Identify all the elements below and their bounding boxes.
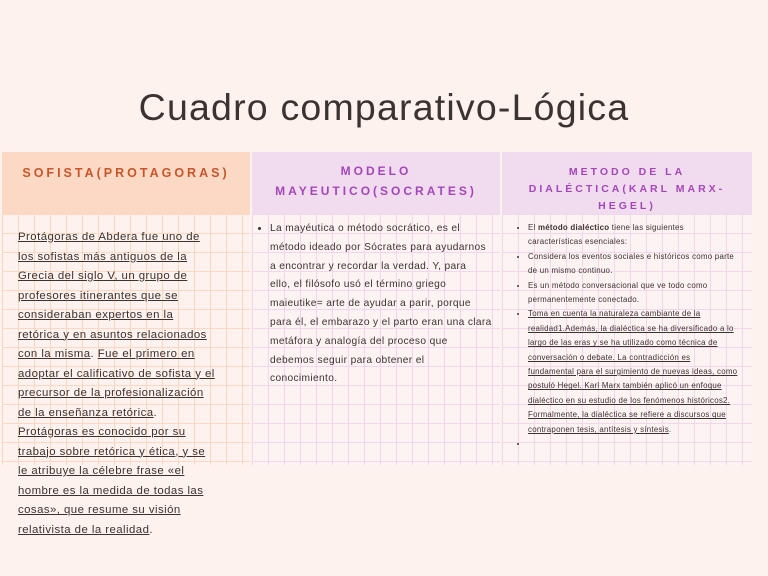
text: mayeutico [258, 223, 492, 384]
panel: dialectica body [502, 214, 752, 465]
panel: mayeutico body [252, 214, 500, 465]
text: sofista: profesores itinerantes que se [18, 290, 178, 302]
panel: mayeutico header: MAYEUTICO(SOCRATES) [275, 184, 477, 198]
text: dialectica: Toma en cuenta la naturaleza cambiante de la [528, 309, 700, 318]
text: mayeutico: para él, el embarazo y el parto eran una clara [270, 317, 492, 328]
text: dialectica: Considera los eventos sociales e históricos como parte [528, 252, 734, 261]
text: dialectica [517, 223, 738, 445]
text: dialectica: permanentemente conectado. [528, 295, 639, 304]
text: dialectica: de un mismo continuo. [528, 266, 613, 275]
panel: mayeutico header [252, 152, 500, 214]
title: Cuadro comparativo-Lógica [139, 86, 629, 128]
panel: sofista header: SOFISTA(PROTAGORAS) [22, 166, 230, 180]
text: dialectica: características esenciales: [528, 237, 627, 246]
panel: sofista header [2, 152, 250, 214]
panel: dialectica header: METODO DE LA [569, 166, 685, 178]
panel: dialectica header: DIALÉCTICA(KARL MARX- [529, 183, 725, 195]
panel: sofista body [2, 214, 250, 465]
text: dialectica: fundamental para el surgimiento de nuevas ideas, como [528, 367, 737, 376]
text: sofista [18, 231, 215, 536]
text: sofista: Protágoras de Abdera fue uno de [18, 231, 200, 243]
text: sofista: precursor de la profesionalización [18, 387, 204, 399]
text: dialectica: El método dialéctico tiene las siguientes [528, 223, 684, 232]
text: dialectica: conversación o debate. La contradicción es [528, 353, 690, 362]
text: sofista: cosas», que resume su visión [18, 504, 181, 516]
text: mayeutico: La mayéutica o método socrático, es el [270, 223, 460, 234]
text: dialectica: Formalmente, la dialéctica se refiere a discursos que [528, 410, 726, 419]
text: mayeutico: conocimiento. [270, 373, 337, 384]
text: sofista: trabajo sobre retórica y ética, y se [18, 446, 205, 458]
text: dialectica: realidad1.Además, la dialéctica se ha diversificado a lo [528, 324, 734, 333]
text: sofista: adoptar el calificativo de sofista y el [18, 368, 215, 380]
text: dialectica: Es un método conversacional que ve todo como [528, 281, 707, 290]
text: mayeutico: método ideado por Sócrates para ayudarnos [270, 242, 486, 253]
text: mayeutico: debemos seguir para obtener el [270, 355, 424, 366]
panel: mayeutico header: MODELO [341, 164, 411, 178]
text: dialectica: dialéctico en su estudio de los fenómenos históricos2. [528, 396, 730, 405]
text: sofista: consideraban expertos en la [18, 309, 173, 321]
text: sofista: relativista de la realidad. [18, 524, 153, 536]
text: dialectica: largo de las eras y se ha utilizado como técnica de [528, 338, 718, 347]
panel: dialectica header [502, 152, 752, 214]
panel: dialectica header: HEGEL) [598, 200, 656, 212]
text: sofista: retórica y en asuntos relacionados [18, 328, 207, 340]
text: mayeutico: maieutike= arte de ayudar a parir, porque [270, 298, 471, 309]
text: dialectica: contraponen tesis, antítesis y síntesis. [528, 425, 671, 434]
text: mayeutico: metáfora y analogía del proceso que [270, 336, 448, 347]
text: sofista: con la misma. Fue el primero en [18, 348, 195, 360]
text: sofista: Protágoras es conocido por su [18, 426, 186, 438]
text: sofista: hombre es la medida de todas las [18, 484, 203, 496]
text: sofista: los sofistas más antiguos de la [18, 250, 187, 262]
text: sofista: Grecia del siglo V, un grupo de [18, 270, 187, 282]
text: sofista: le atribuye la célebre frase «el [18, 465, 184, 477]
text: mayeutico: ello, el filósofo usó el término griego [270, 279, 446, 290]
text: mayeutico: a encontrar y recordar la verdad. Y, para [270, 261, 466, 272]
text: sofista: de la enseñanza retórica. [18, 406, 157, 418]
text: dialectica: postuló Hegel. Karl Marx también aplicó un enfoque [528, 381, 722, 390]
